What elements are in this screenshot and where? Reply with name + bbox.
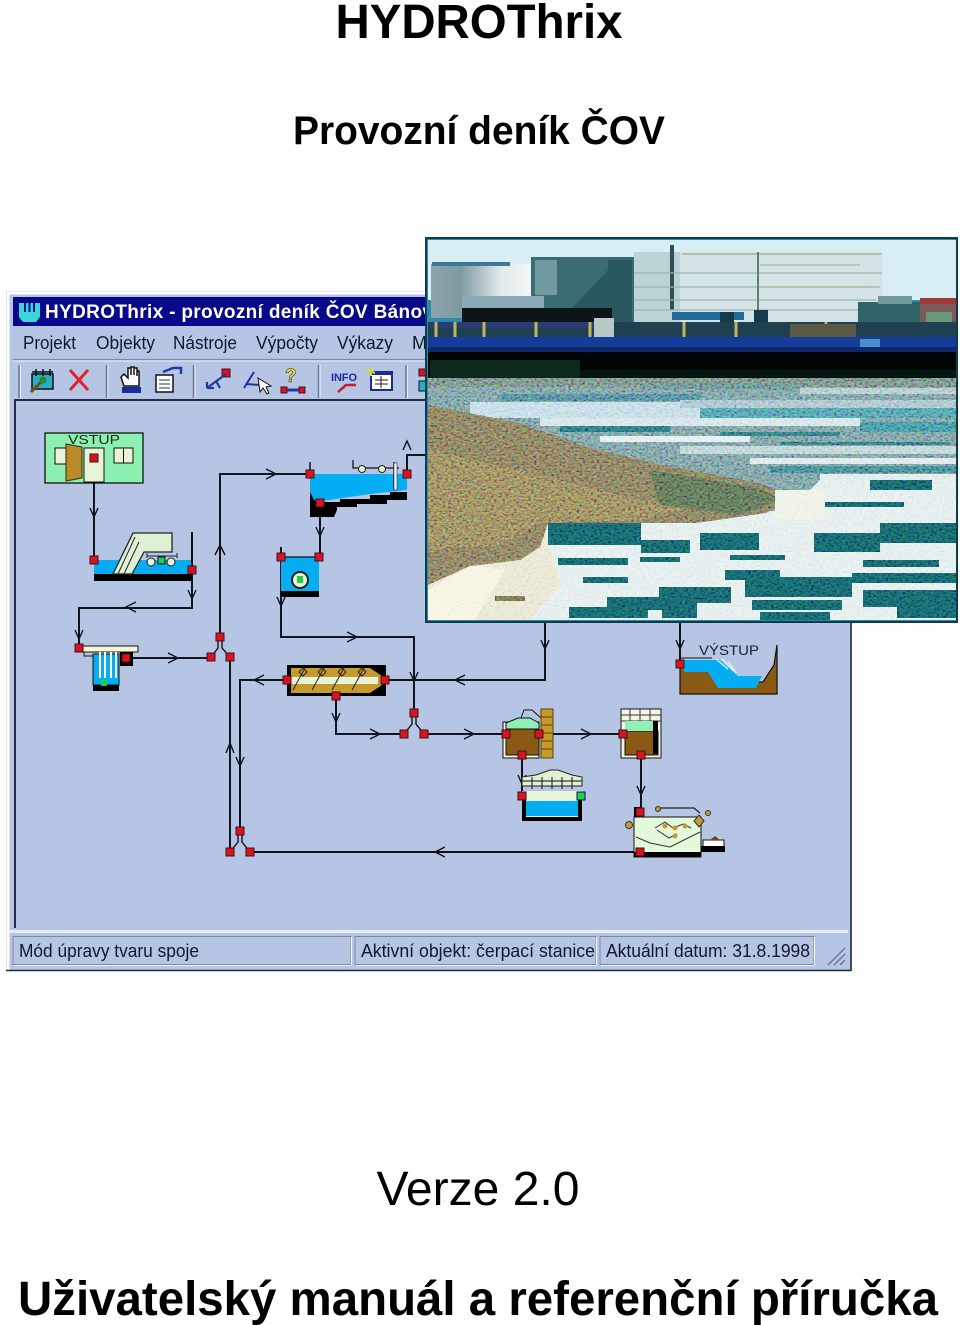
icon: pointer (244, 372, 271, 394)
document type heading: Uživatelský manuál a referenční příručka (18, 1273, 938, 1325)
dark wall (428, 352, 958, 378)
status bar: Mód úpravy tvaru spoje (19, 941, 199, 961)
icon: gas holder (518, 770, 585, 821)
icon: clarifier (75, 644, 138, 691)
icon: sludge dewatering machine (626, 806, 725, 857)
beach gravel (428, 405, 795, 585)
icon: connection (207, 369, 230, 388)
version label: Verze 2.0 (376, 1163, 580, 1216)
icon: inlet VSTUP: VSTUP (68, 432, 120, 447)
subtitle: Provozní deník ČOV (293, 107, 665, 153)
toolbar (19, 365, 426, 398)
water surface (428, 387, 956, 511)
icon: pump tank (277, 553, 323, 597)
chart: process flow lines (75, 441, 684, 857)
icon: settling tank top right (306, 460, 411, 517)
splitter links (211, 640, 424, 852)
foam field (530, 480, 958, 620)
icon: screw press (283, 665, 389, 700)
status bar: Aktivní objekt: čerpací stanice (361, 941, 595, 961)
icon: inlet VSTUP (45, 432, 143, 483)
icon: properties form (156, 368, 181, 392)
icon: help: ? (285, 366, 297, 387)
menu bar: Objekty (96, 333, 155, 353)
icon: splitter nodes (207, 633, 428, 856)
menu bar: Výkazy (337, 333, 393, 353)
icon: screen unit (90, 532, 196, 581)
title bar (13, 297, 433, 326)
menu bar (23, 333, 427, 353)
sky (428, 240, 956, 300)
panel: photo of treatment plant (425, 237, 960, 623)
menu bar: Nástroje (173, 333, 237, 353)
menu bar: M (412, 333, 427, 353)
icon: info (331, 372, 357, 392)
title bar: HYDROThrix - provozní deník ČOV Bánov (45, 301, 433, 323)
icon: outlet VYSTUP (676, 642, 777, 694)
icon: info: INFO (331, 372, 357, 384)
arrows (75, 441, 684, 857)
canvas frame (15, 400, 430, 928)
menu bar: Projekt (23, 333, 76, 353)
photo grain (428, 378, 958, 623)
status bar: Aktuální datum: 31.8.1998 (606, 941, 810, 961)
buildings (428, 245, 958, 338)
icon: hand (121, 367, 141, 393)
embankment blue band (428, 337, 956, 347)
icon: new form (366, 367, 392, 390)
icon: digester 2 (619, 709, 661, 759)
status bar (9, 932, 848, 966)
icon: digester 1 (502, 709, 553, 759)
icon: outlet VYSTUP: VÝSTUP (699, 642, 759, 658)
menu bar: Výpočty (256, 333, 318, 353)
icon: help (281, 366, 305, 393)
icon: tank with tool (31, 369, 53, 392)
icon: delete cross (70, 370, 88, 390)
panel: application window (6, 291, 851, 971)
icon: cut off tool (419, 369, 426, 391)
dark foam gaps (548, 480, 960, 620)
